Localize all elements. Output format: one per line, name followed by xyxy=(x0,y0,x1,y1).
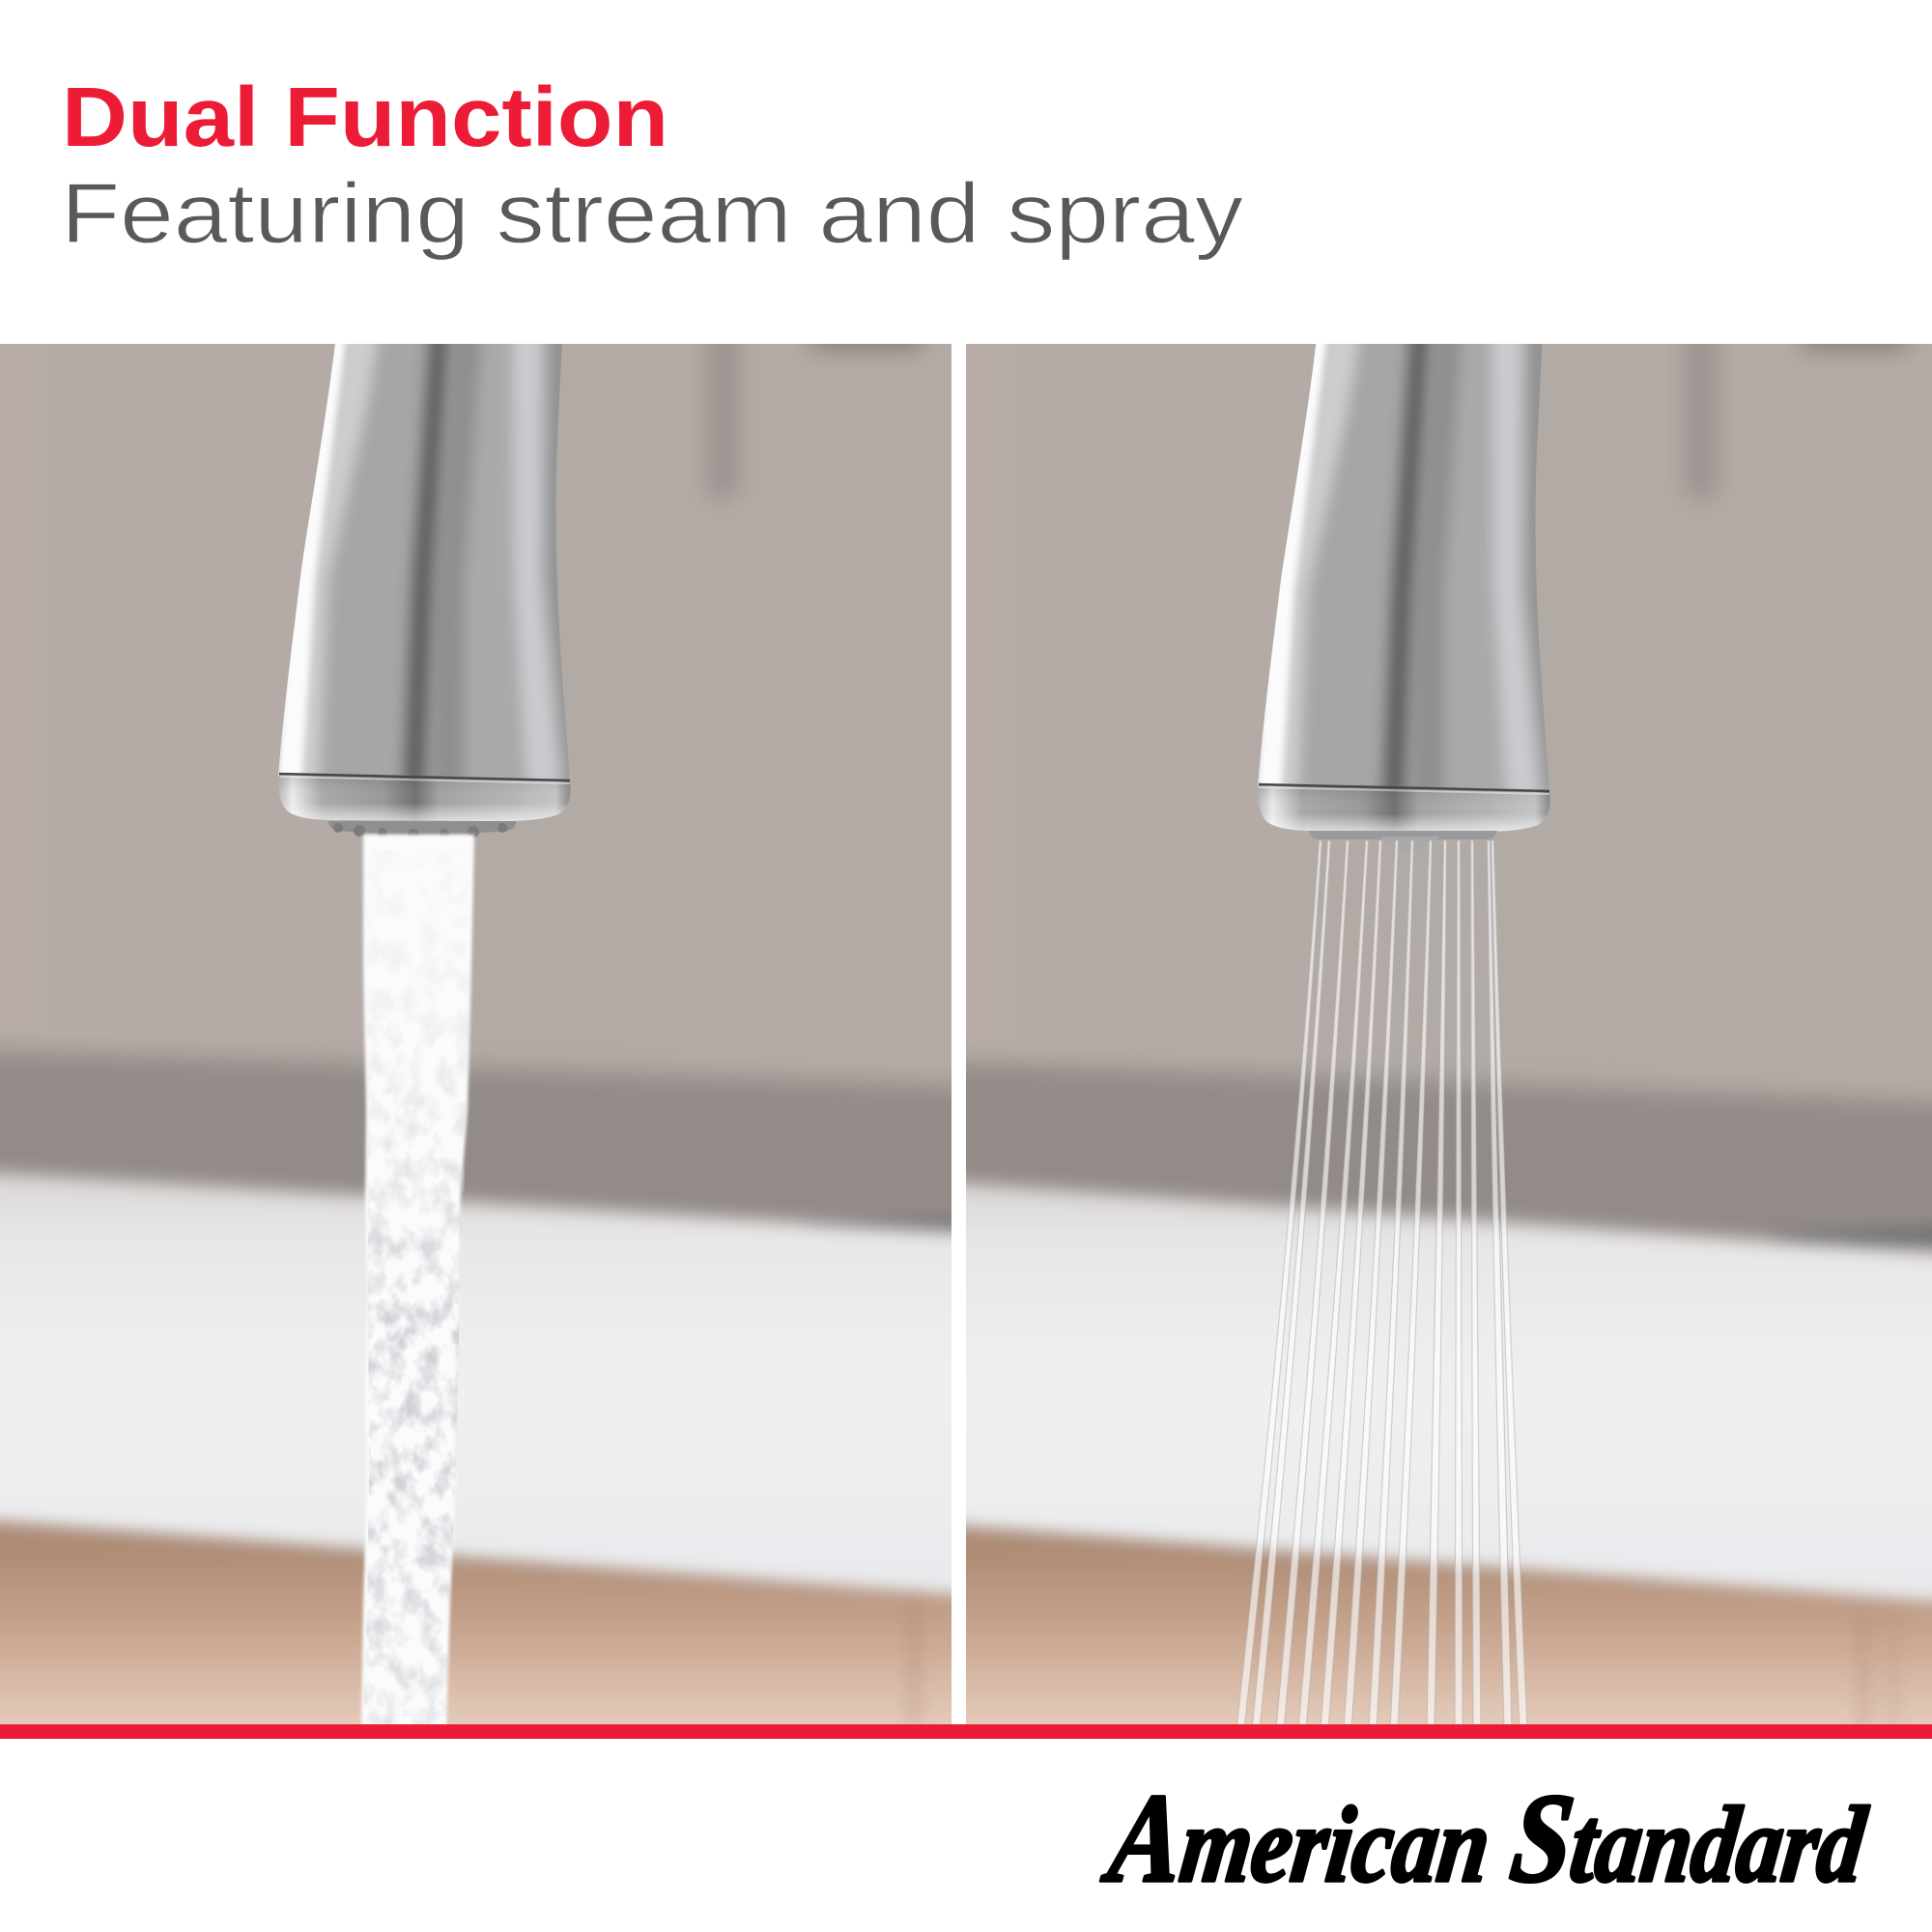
background: kitchen scene right xyxy=(927,319,1932,1768)
title: Dual Function: Dual Function xyxy=(62,71,668,164)
water spray jets xyxy=(1236,840,1527,1729)
nozzle xyxy=(1309,831,1497,852)
panel: spray mode photo xyxy=(927,319,1932,1768)
red divider bar xyxy=(0,1724,1932,1739)
water stream xyxy=(361,835,474,1729)
background: kitchen scene left xyxy=(0,319,995,1768)
logo: American Standard: American Standard xyxy=(1097,1767,1875,1909)
faucet: spray side xyxy=(1250,325,1559,852)
subtitle: Featuring stream and spray: Featuring stream and spray xyxy=(61,165,1243,261)
panel: stream mode photo xyxy=(0,314,995,1768)
faucet: stream side xyxy=(278,344,570,838)
nozzle xyxy=(328,821,516,838)
